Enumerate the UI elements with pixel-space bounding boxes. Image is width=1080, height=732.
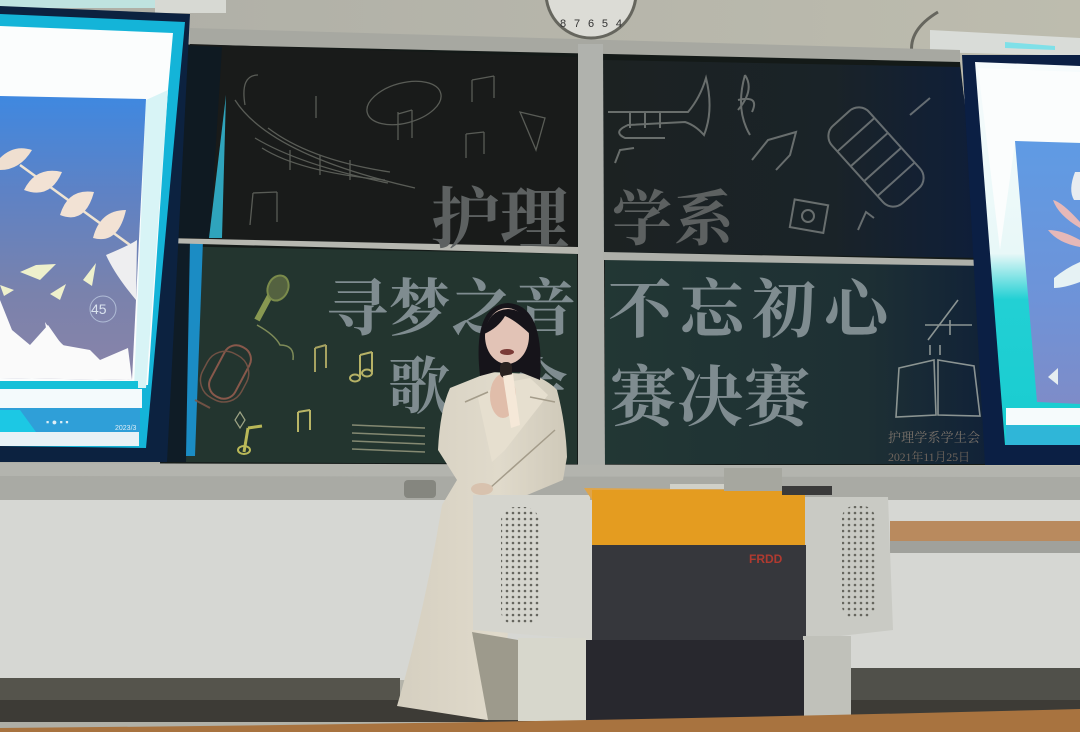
lips [500,349,514,355]
chalk heading: 护理学系 [431,184,735,257]
side desk [890,521,1080,553]
chalk drawing: staff and notes upper left [235,74,545,225]
wall clock: 8 7 6 5 4 [560,18,622,30]
collar lines [465,392,555,488]
hair [479,303,541,380]
chalk signature: 2021年11月25日 [888,449,970,464]
left projector screen: 2023/3 [115,425,137,432]
microphone [500,362,520,428]
left projector screen [0,6,190,462]
waist hand [471,483,493,495]
foreground desk edge [0,709,1080,732]
chalk heading: 护理学系: 学系 [612,187,735,253]
slide image [1015,141,1080,404]
chalkboard frame [160,28,1005,465]
chalkboard panels [160,44,1003,464]
chalk heading: 护理学系: 护理 [431,184,569,257]
face [485,308,529,364]
brand label: FRDD [749,552,783,566]
chalk subtitle: 赛决赛: 赛决赛 [610,362,815,435]
taskbar icons: ▪ ● ▪ ▪ [46,417,69,427]
screen timer badge: 45 [91,301,107,317]
laptop and items [724,468,782,491]
trench coat [397,372,567,720]
chalk title: 寻梦之音: 寻梦之音 [326,276,576,344]
hand [490,374,516,418]
trousers shadow [472,632,518,720]
clouds [0,300,132,380]
chalk drawing: microphones and notes lower left [193,272,425,454]
speaker grille right [842,506,875,618]
screen timer badge [90,296,116,322]
lower wall panel [0,668,1080,722]
lectern [473,468,893,721]
coat lapel [478,378,548,462]
chalk signature: 护理学系学生会 [888,430,980,445]
blue light strips [186,240,203,456]
fringe [484,309,530,334]
wall clock [546,0,636,38]
chalk title: 不忘初心: 不忘初心 [608,275,896,346]
speaker [397,303,567,720]
slide image [0,96,146,380]
screen footer band [0,381,138,389]
board rails and centre post [0,44,1080,477]
ceiling fixtures [0,0,1080,56]
chalk subtitle: 歌会: 歌会 [388,354,568,422]
dandelions [0,148,137,300]
chalk drawing: trumpet and notes upper right [608,75,930,233]
chalk drawing: open book [896,300,980,417]
chalk signature [888,430,980,464]
birds [0,263,96,300]
speaker grille left [501,507,539,625]
right projector screen [962,55,1080,465]
wall socket [404,480,436,498]
